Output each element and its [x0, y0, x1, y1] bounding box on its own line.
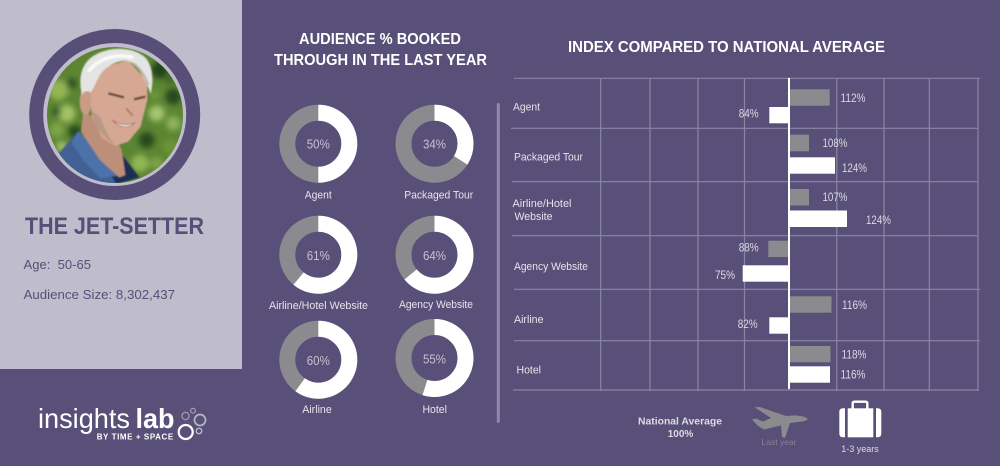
legend: national average: 100% [668, 429, 693, 440]
row: Hotel: 116% [840, 370, 866, 382]
donut charts [269, 113, 474, 416]
row: Airline/Hotel Website: 107% [822, 192, 848, 204]
heading: audience booked [274, 31, 487, 69]
row: Hotel: Hotel [516, 364, 541, 376]
row: Airline: Airline [514, 314, 544, 326]
donut: Packaged Tour 34% [404, 113, 474, 202]
logo: insights lab: BY TIME + SPACE [97, 432, 174, 442]
audience size: Audience Size: 8,302,437 [24, 287, 175, 302]
row: Airline: 116% [842, 300, 867, 312]
donut: Agency Website 64% [399, 224, 473, 311]
shirt [58, 131, 118, 183]
row: Hotel [516, 346, 866, 383]
donut: Airline/Hotel Website 61% [269, 224, 368, 312]
donut: Agent 50%: Agent [305, 190, 332, 202]
donut: Agent 50% [287, 113, 349, 202]
row: Packaged Tour: 124% [842, 163, 867, 175]
row: Agent: 84% [739, 108, 759, 120]
persona name: THE JET-SETTER [25, 213, 204, 240]
row: Airline/Hotel Website: Website [514, 211, 552, 223]
legend: last year plane icon [752, 407, 808, 447]
legend: national average [638, 416, 722, 440]
row: Airline/Hotel Website: Airline/Hotel [512, 198, 572, 210]
portrait photo in ring [36, 36, 193, 193]
logo: insights lab [38, 403, 206, 442]
row: Agency Website: 75% [715, 270, 735, 282]
row: Airline [514, 296, 867, 334]
row: Airline: 82% [738, 319, 758, 331]
panel: persona [0, 0, 242, 369]
row: Airline/Hotel Website [512, 189, 891, 227]
heading: index compared: INDEX COMPARED TO NATIONAL AVERAGE [568, 39, 885, 56]
row: Agent: Agent [513, 102, 540, 114]
bar chart: index vs national average [511, 78, 980, 391]
ear [80, 88, 92, 115]
heading: audience booked: THROUGH IN THE LAST YEAR [274, 52, 487, 69]
donut: Hotel 55% [404, 327, 466, 416]
row: Hotel: 118% [842, 350, 866, 362]
hair [80, 49, 152, 95]
logo: insights lab: lab [136, 403, 174, 434]
legend: national average: National Average [638, 416, 722, 428]
row: Packaged Tour: Packaged Tour [514, 152, 583, 164]
legend: last year plane icon: Last year [762, 437, 797, 447]
row: Agency Website: Agency Website [514, 261, 588, 273]
row: Agency Website: 88% [739, 242, 759, 254]
donut: Agent 50%: 50% [307, 136, 330, 152]
logo: insights lab: insights [38, 403, 130, 434]
donut: Airline 60% [287, 329, 349, 416]
heading: audience booked: AUDIENCE % BOOKED [299, 31, 461, 48]
donut: Airline/Hotel Website 61%: Airline/Hotel Website [269, 300, 368, 312]
row: Packaged Tour [514, 135, 867, 175]
donut: Hotel 55%: Hotel [422, 404, 447, 416]
donut: Airline/Hotel Website 61%: 61% [307, 248, 330, 263]
row: Airline/Hotel Website: 124% [866, 215, 891, 227]
donut: Airline 60%: 60% [307, 353, 330, 368]
donut: Packaged Tour 34%: Packaged Tour [404, 190, 474, 202]
donut: Airline 60%: Airline [302, 404, 332, 416]
donut: Hotel 55%: 55% [423, 352, 446, 366]
smile [113, 120, 135, 127]
national average line [788, 78, 790, 389]
donut: Agency Website 64%: Agency Website [399, 299, 473, 311]
age: Age: 50-65 [24, 257, 91, 272]
donut: Agency Website 64%: 64% [423, 248, 446, 263]
row: Agency Website [514, 241, 789, 282]
legend: 1-3 years suitcase icon [839, 402, 881, 454]
row: Agent [513, 89, 866, 123]
face [90, 60, 147, 146]
neck [81, 110, 125, 177]
brows and eyes [108, 93, 124, 97]
row: Packaged Tour: 108% [822, 138, 848, 150]
donut: Packaged Tour 34%: 34% [423, 136, 446, 152]
row: Agent: 112% [840, 93, 866, 105]
legend: 1-3 years suitcase icon: 1-3 years [841, 444, 879, 454]
